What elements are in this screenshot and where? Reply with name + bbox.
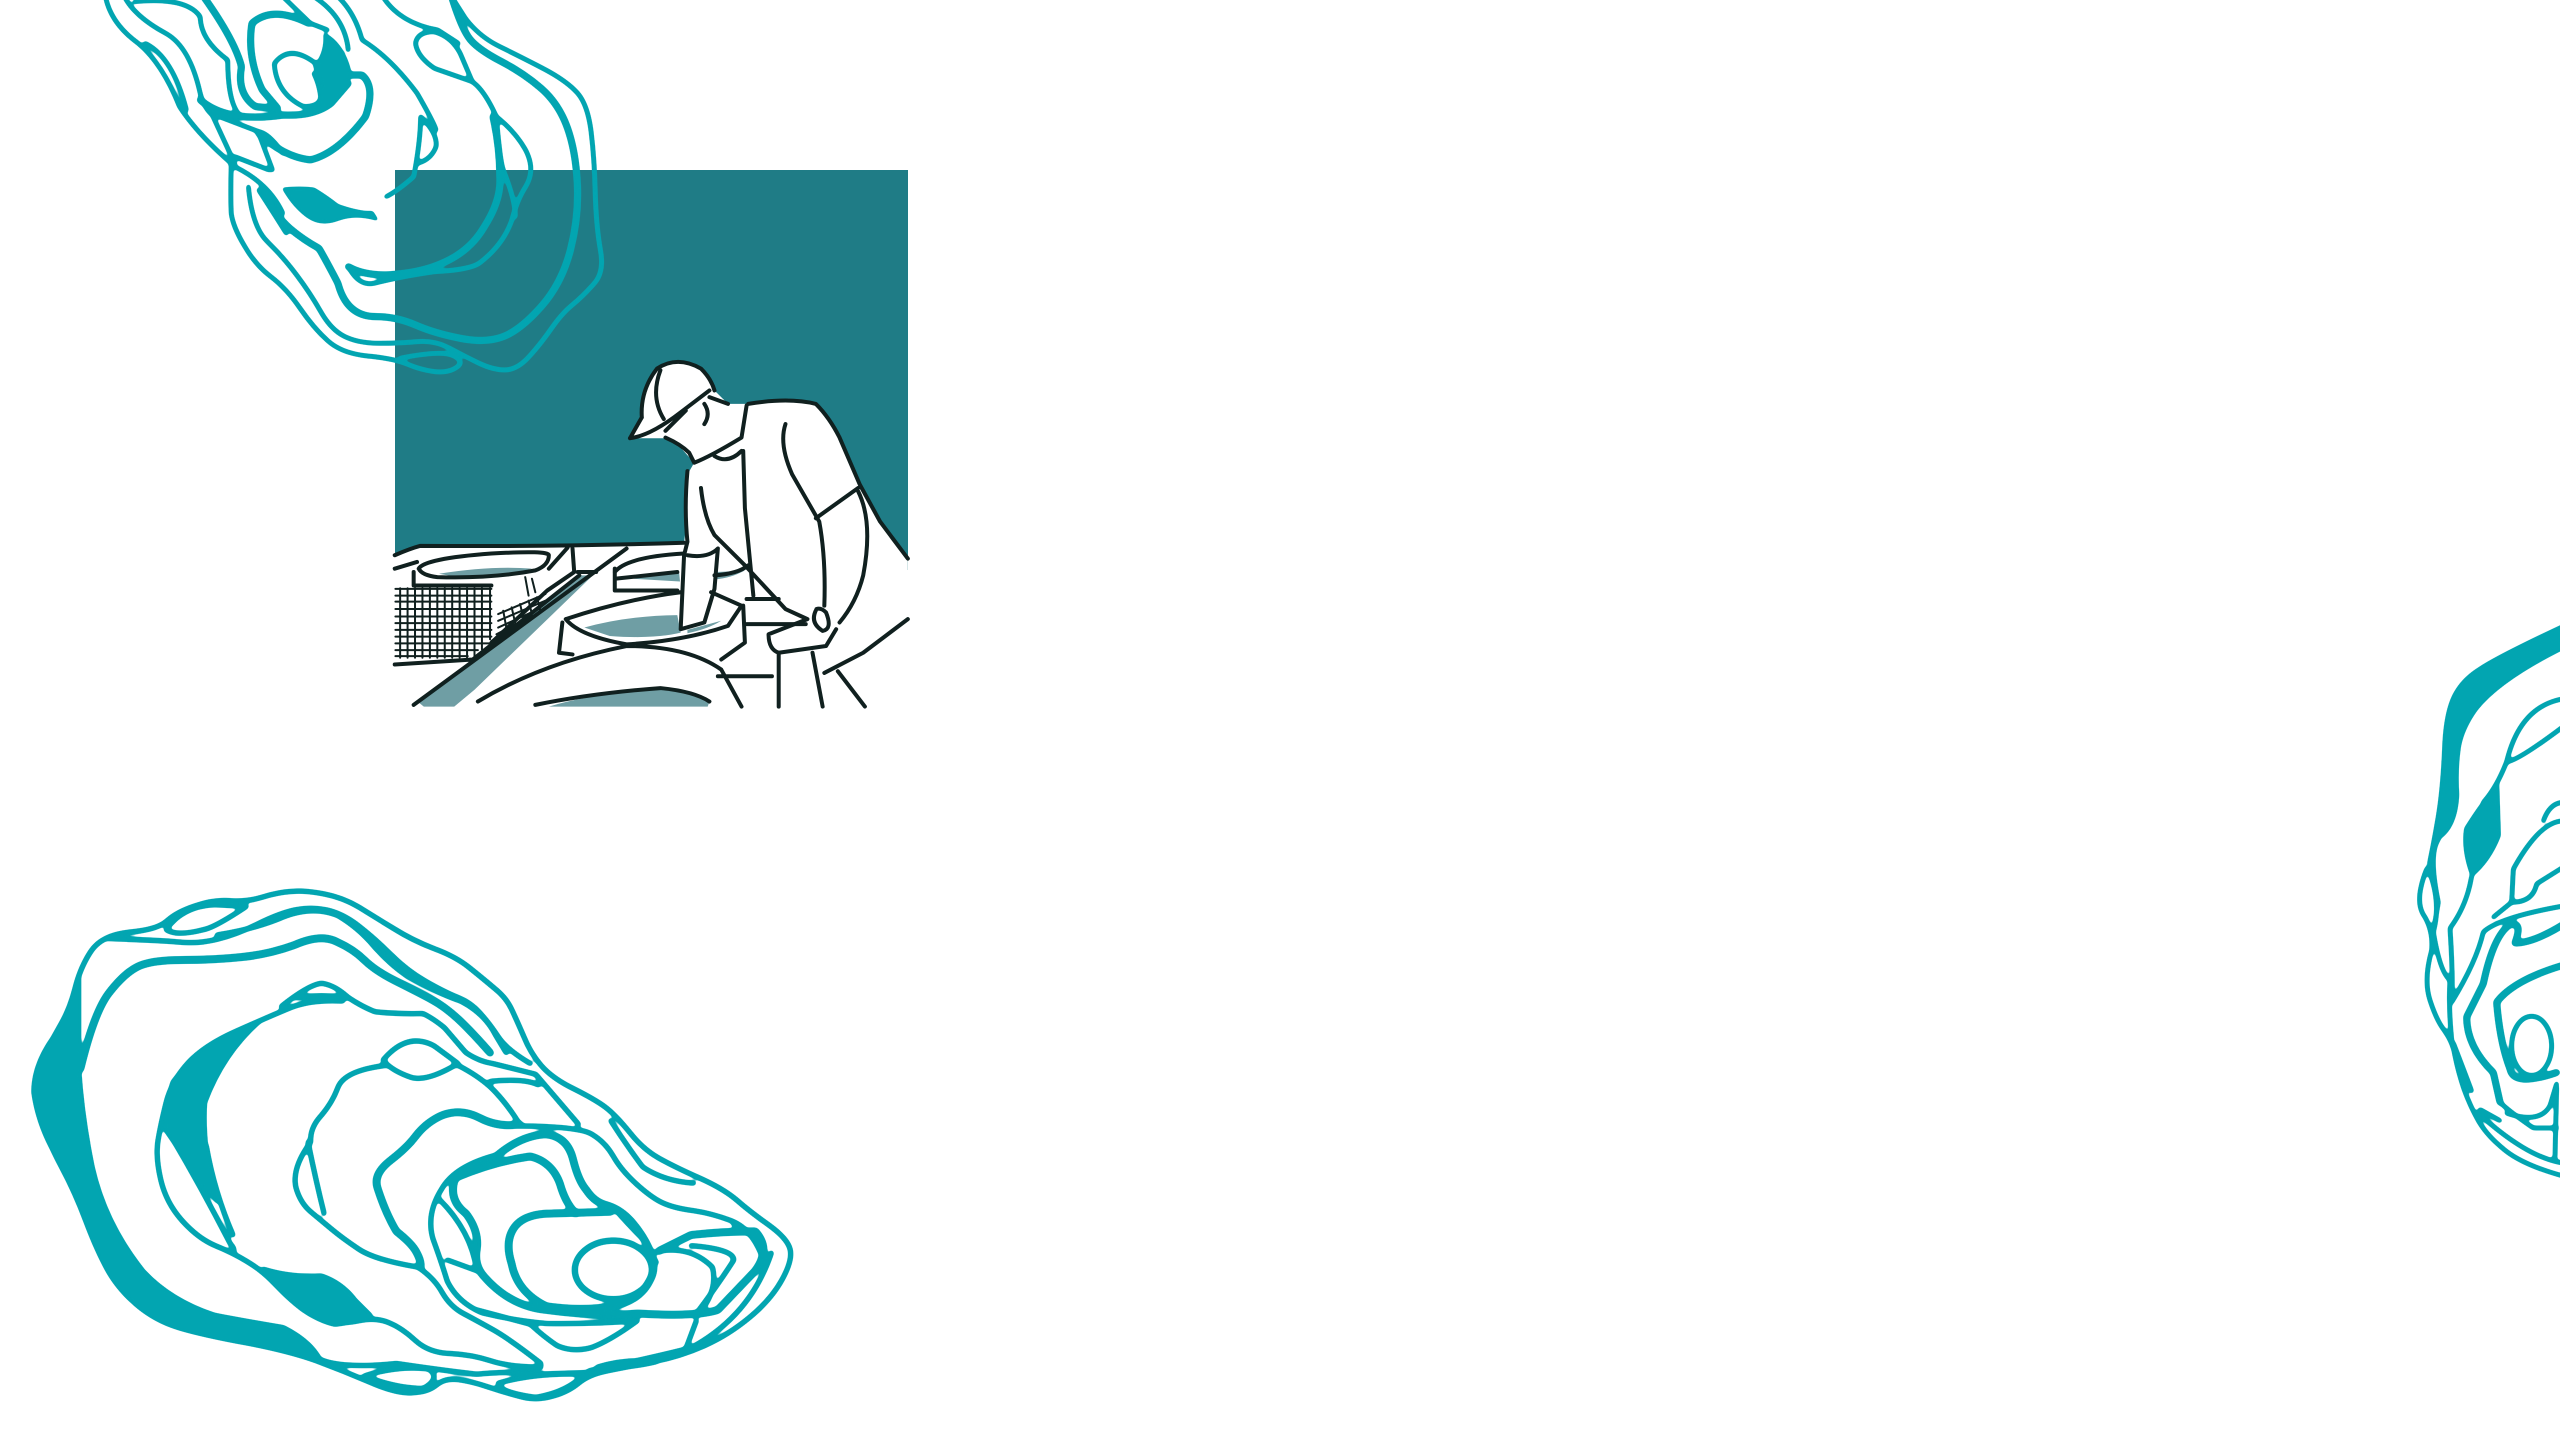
outer growth rings xyxy=(80,905,541,1367)
icon: oyster shell, right edge xyxy=(2420,625,2560,1176)
inner rings xyxy=(431,1134,771,1371)
white silhouette of worker and table xyxy=(395,360,908,708)
icon: oyster shell, top left xyxy=(105,0,602,372)
table and left tank xyxy=(395,543,684,705)
wire basket xyxy=(395,577,545,658)
pearl ring xyxy=(575,1241,652,1299)
lower edge lobes xyxy=(321,1360,656,1397)
middle and front tanks xyxy=(478,554,772,707)
white lower margin strip xyxy=(395,708,908,723)
thick left edge of shell xyxy=(32,967,324,1365)
central dark blob xyxy=(314,33,350,107)
cap and face xyxy=(630,362,747,463)
icon: oyster shell, bottom left xyxy=(32,891,791,1399)
outer contour xyxy=(36,891,791,1399)
panel: teal square background xyxy=(395,170,908,570)
drainage channel xyxy=(419,575,593,707)
thick outer band xyxy=(2427,625,2560,869)
middle rings xyxy=(295,1041,761,1364)
water in tanks xyxy=(439,568,745,707)
thick leaf blob xyxy=(2464,784,2500,876)
central thick knot xyxy=(613,1210,659,1264)
thick inner band xyxy=(165,1017,268,1203)
thick blobs xyxy=(283,187,378,223)
shell contour lines xyxy=(105,0,602,372)
illustration: worker tending oyster tanks xyxy=(395,360,908,723)
contour lines xyxy=(2420,699,2560,1176)
wrist and tank handle xyxy=(747,599,908,707)
thick lower blob xyxy=(262,1267,372,1326)
shirt and arms xyxy=(681,401,908,653)
